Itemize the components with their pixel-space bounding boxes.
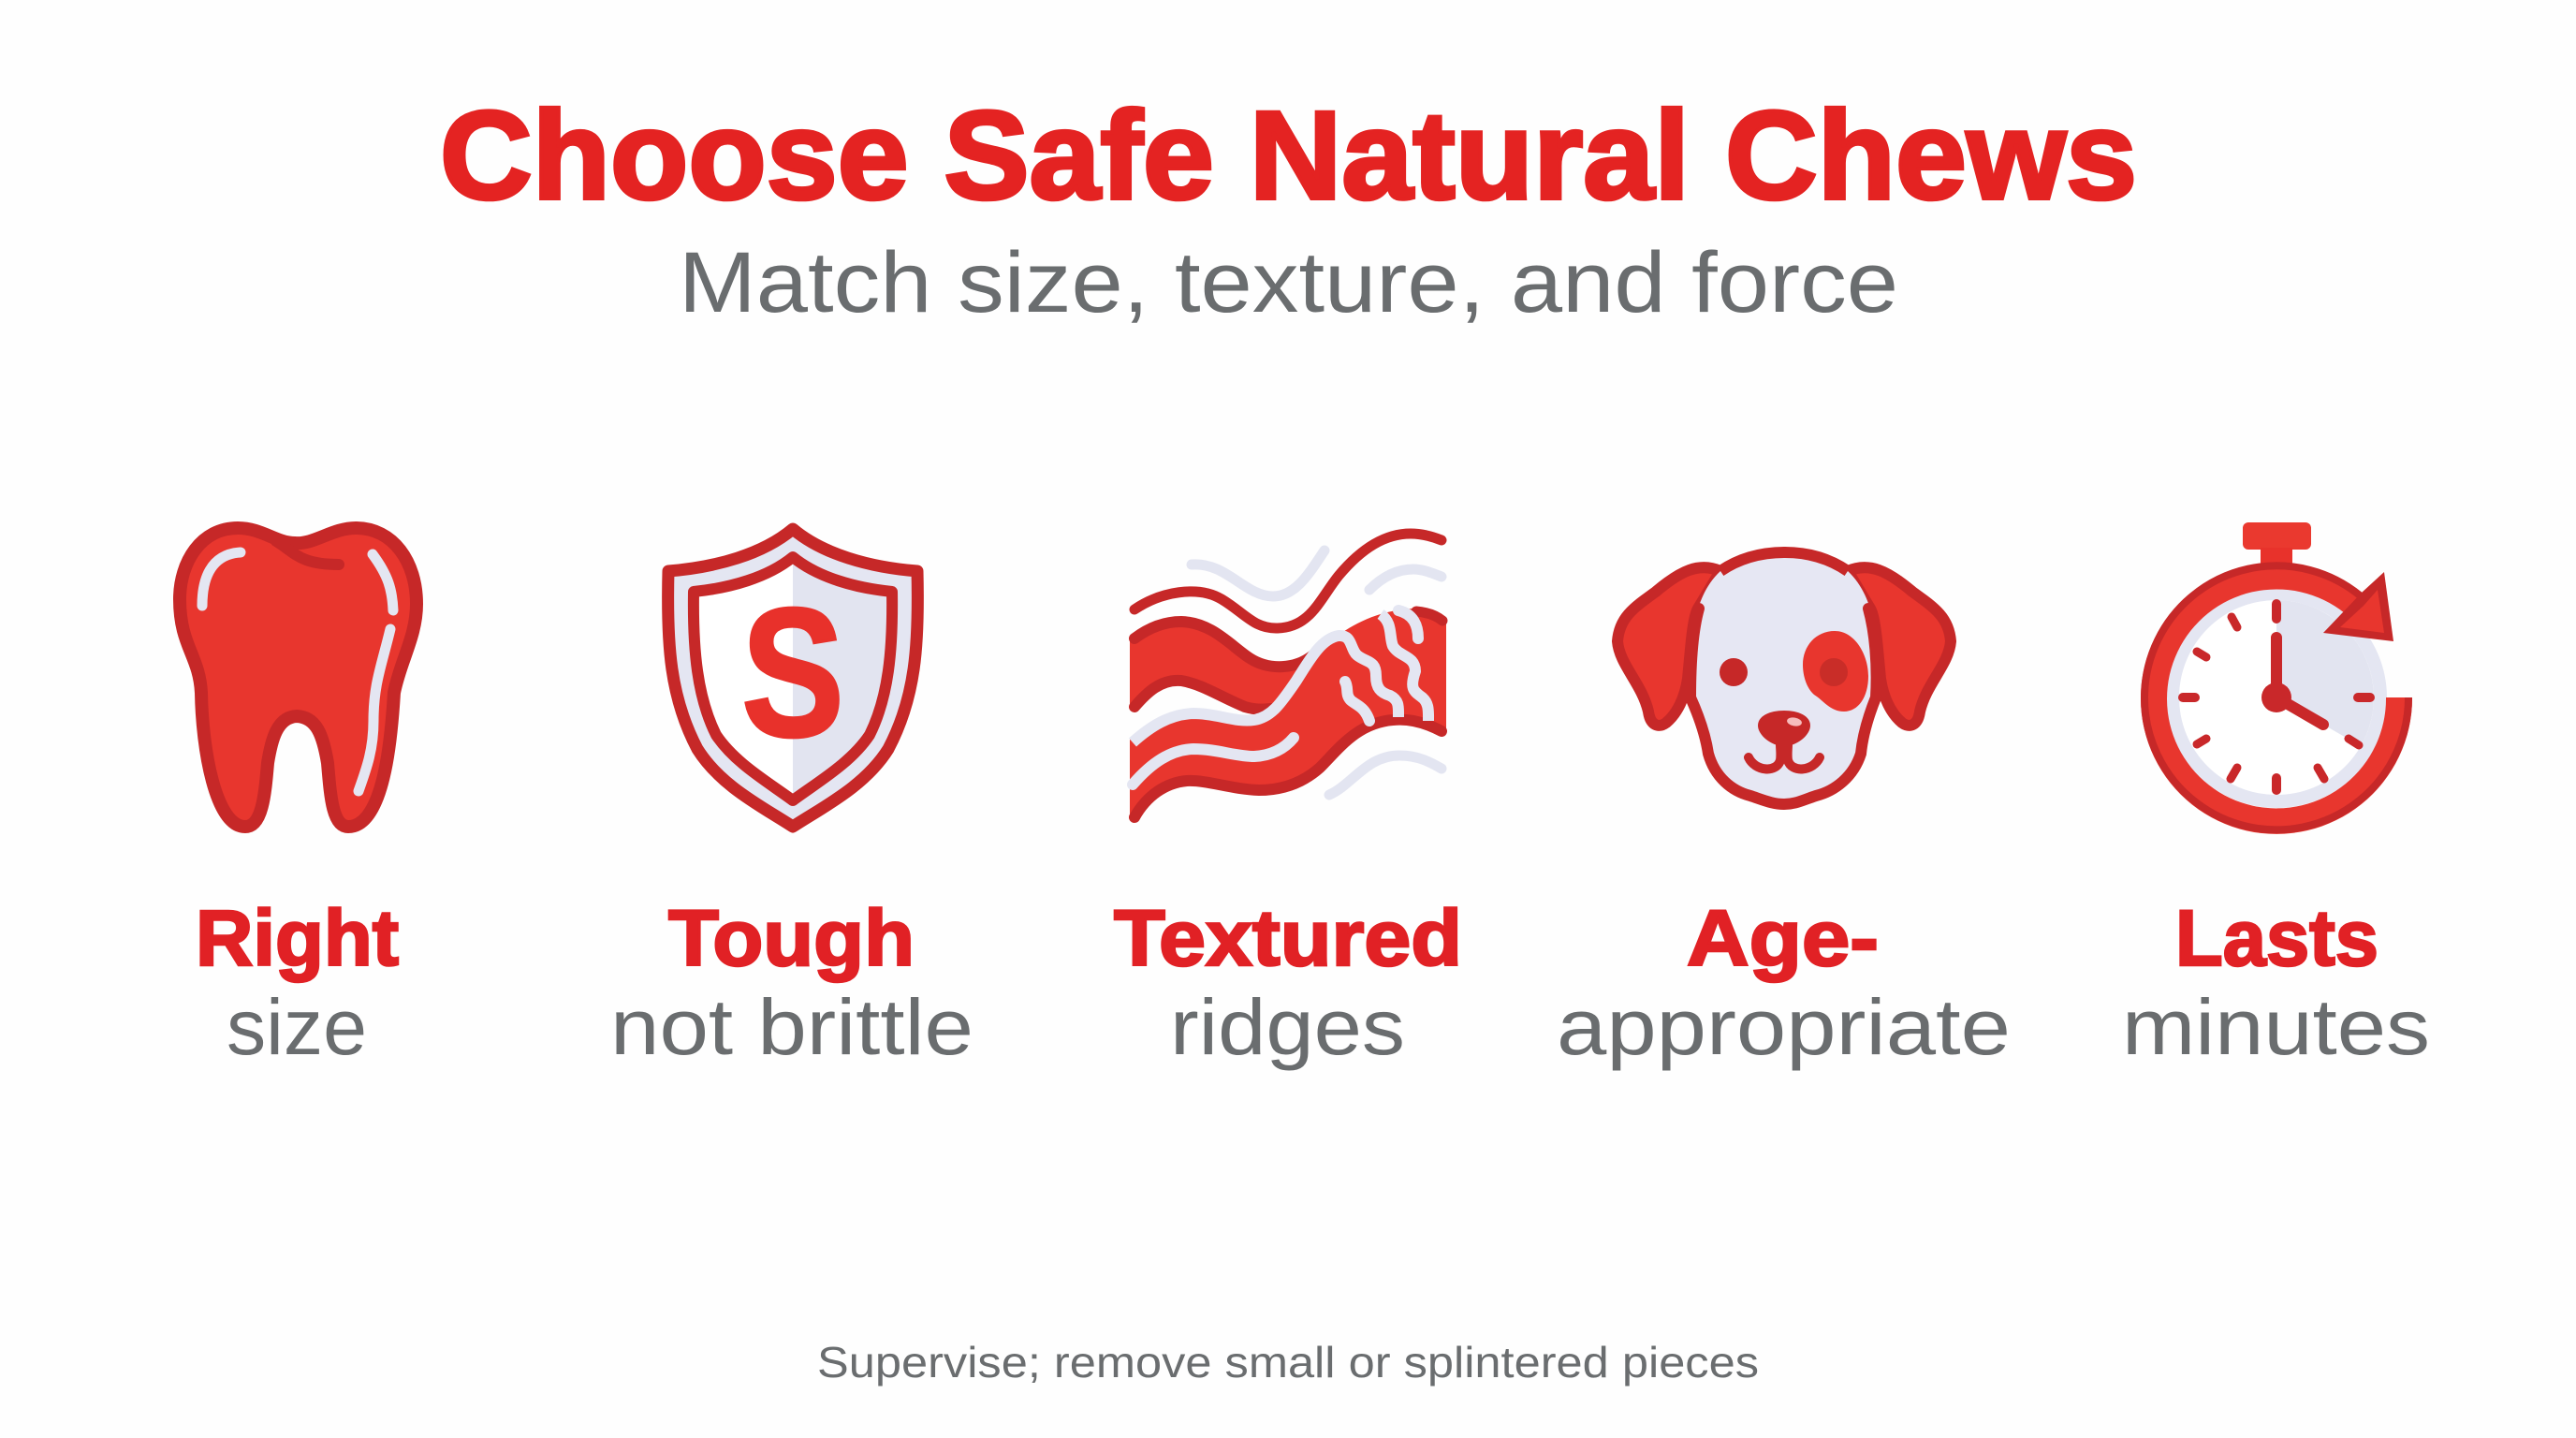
label: lasts minutes: Lasts (2175, 894, 2378, 982)
label: lasts minutes (2122, 894, 2430, 1071)
label: right size (196, 894, 399, 1071)
icon: puppy face (1617, 552, 1951, 804)
icon: tooth (180, 528, 417, 827)
subtitle: Match size, texture, and force (679, 235, 1898, 330)
label: textured ridges (1114, 894, 1462, 1071)
icon: stopwatch (2141, 522, 2412, 834)
label: tough not brittle: not brittle (610, 983, 973, 1071)
label: right size: Right (196, 894, 399, 982)
label: tough not brittle: Tough (668, 894, 915, 982)
label: age-appropriate (1557, 894, 2011, 1071)
icon: shield: S (741, 570, 844, 775)
label: age-appropriate: appropriate (1557, 983, 2011, 1071)
label: age-appropriate: Age- (1687, 894, 1879, 982)
label: textured ridges: ridges (1170, 983, 1405, 1071)
icon: shield (668, 529, 917, 827)
icon: textured ridges (1130, 534, 1446, 819)
label: right size: size (227, 983, 367, 1071)
footer note: Supervise; remove small or splintered pieces (817, 1338, 1759, 1387)
title: Choose Safe Natural Chews (440, 86, 2137, 226)
label: tough not brittle (610, 894, 973, 1071)
label: textured ridges: Textured (1114, 894, 1462, 982)
label: lasts minutes: minutes (2122, 983, 2430, 1071)
